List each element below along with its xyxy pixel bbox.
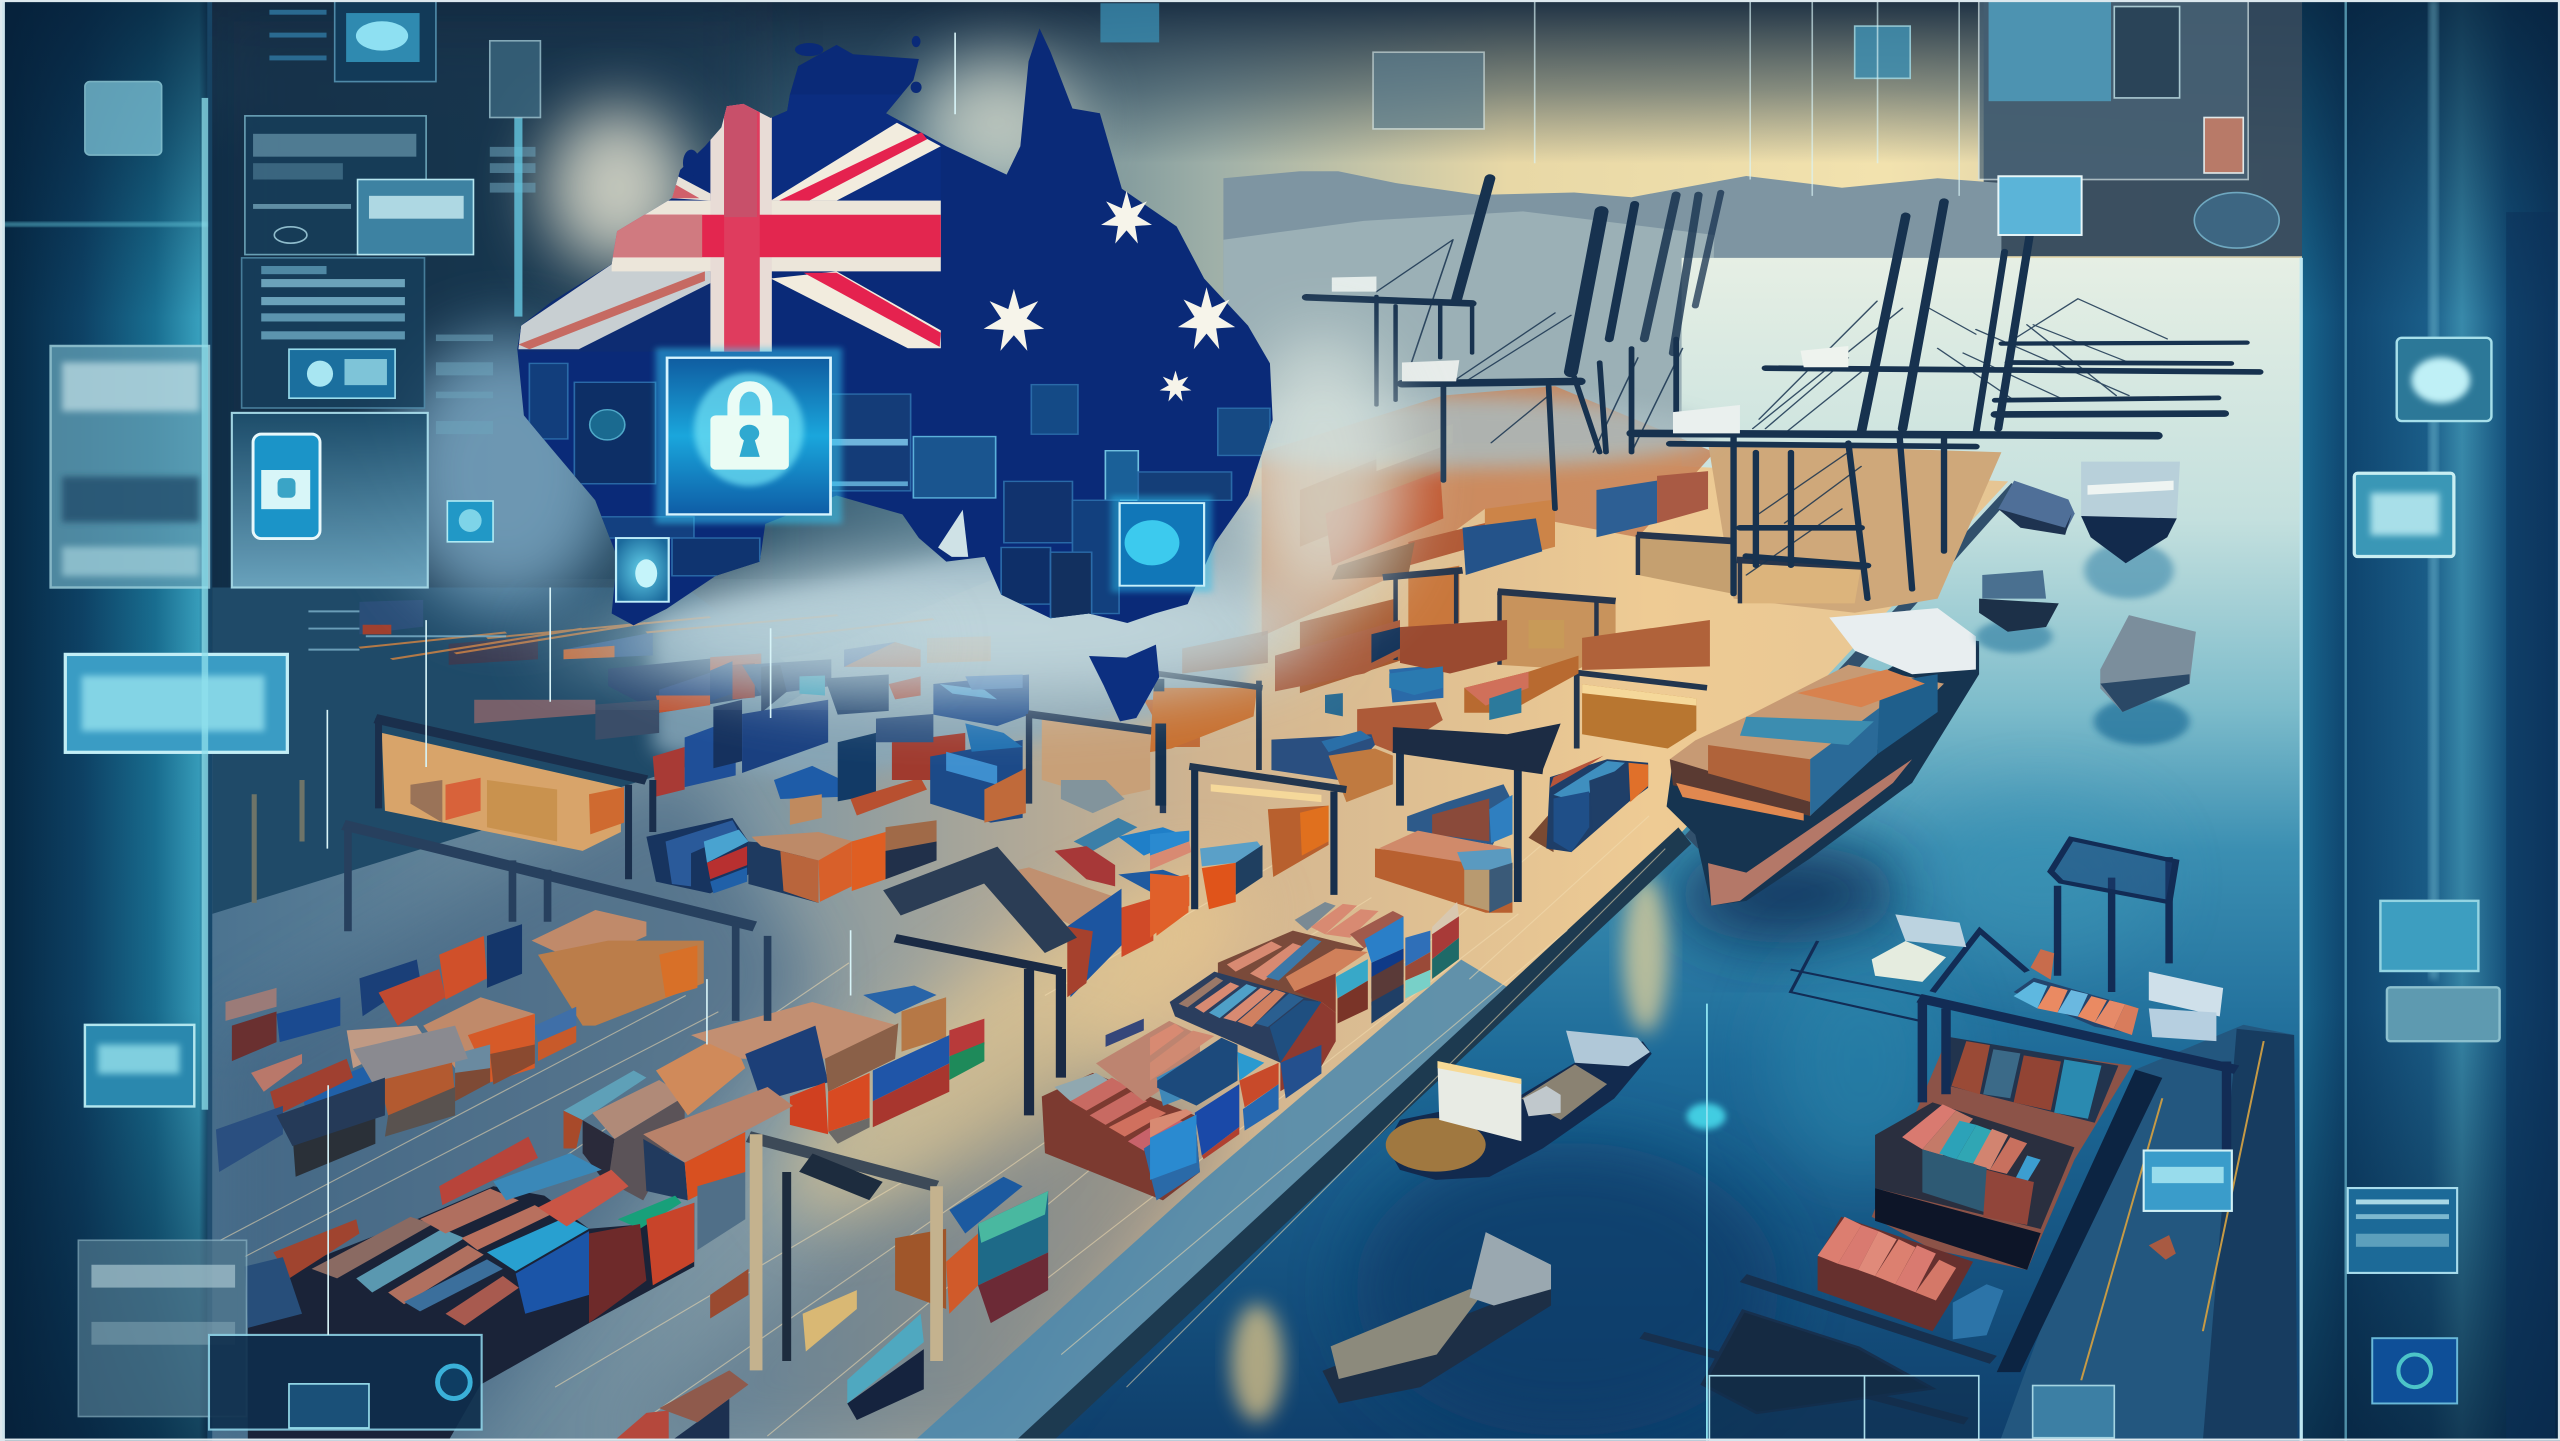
card: wifi icon: [289, 349, 395, 398]
panel: globe icon: [2372, 1338, 2457, 1403]
left UI panels: [51, 82, 287, 1417]
Australia map with flag: [513, 28, 1273, 625]
card: shield icon: [1998, 176, 2082, 235]
middle container row: [1875, 1102, 2074, 1270]
panel: wide glowing card: [65, 654, 287, 752]
circuit details lower map: [529, 363, 1270, 618]
warehouse: lit right: [1570, 672, 1707, 749]
card: top left icon: [335, 0, 436, 82]
upper left hazy yard backdrop: [212, 490, 1273, 914]
panel: bottom left card: [78, 1240, 247, 1417]
gantry: rear left: [254, 719, 653, 903]
ship: white ferry: [2081, 462, 2180, 599]
truck on quay: [2149, 1235, 2176, 1260]
ship: grey vessel: [2094, 615, 2196, 745]
panel: top icon: [85, 82, 162, 155]
panel: list: [242, 258, 424, 408]
bright vertical strip: [514, 117, 522, 317]
gantry: rear right: [1028, 714, 1166, 813]
right UI panels: [2348, 338, 2500, 1403]
container yard: left and central stacks: [216, 700, 1200, 1440]
right band: [2300, 0, 2560, 1441]
stack: beside center gantry: [975, 818, 1188, 997]
panel: third: [2380, 901, 2478, 971]
ship deck: [1872, 1041, 2132, 1270]
quay deck: [212, 449, 2018, 1441]
upper crane frame: [1791, 839, 2237, 1151]
gantry: tangled machinery: [1393, 724, 1561, 902]
barge with white cabin: [1386, 1031, 1652, 1180]
side fine rows: [436, 147, 536, 434]
flag stars: [984, 191, 1235, 401]
card: dark rows left of icon: [269, 10, 327, 60]
panel: lower card: [85, 1025, 194, 1106]
dashboard panel upper left: [202, 98, 536, 1110]
crane booms and legs: [1306, 296, 2260, 599]
quay wall: [1016, 827, 1691, 1441]
flag union jack: [513, 94, 941, 352]
container ship main: [1667, 608, 1979, 906]
deck containers: [1670, 665, 1944, 821]
icon: phone with lock: [253, 434, 320, 539]
vertical light lines: [327, 0, 1959, 1441]
stack: left middle: [216, 910, 704, 1177]
stack: top cluster: [474, 700, 1200, 825]
gantry: center machine: [892, 865, 1061, 1115]
card: grid: [490, 41, 540, 117]
stack: beside front gantry: [615, 1177, 1048, 1440]
stack: strip tops row: [1170, 972, 1336, 1098]
hull: [1667, 636, 1979, 906]
deck lane streaks: [220, 767, 1665, 1436]
stack: bottom left large: [245, 1137, 694, 1440]
stack: blue and red row: [1218, 902, 1459, 1023]
icon: heart seal: [2194, 193, 2279, 248]
stack: right by ship: [1529, 756, 1648, 852]
quay markings: [2081, 1041, 2264, 1380]
stack: bottom edge: [1150, 1023, 1279, 1180]
upper yard stacks: [1300, 424, 1861, 703]
stack: second row: [646, 818, 937, 903]
card: quay data: [2144, 1151, 2232, 1211]
front ship bridge frame: [1642, 1278, 1993, 1421]
column glow: [202, 98, 208, 1110]
antifouling stripe: [1708, 759, 1912, 906]
upper row stacks: [1182, 620, 1710, 752]
front container row: [1818, 1217, 2003, 1339]
gantry: lit left: [1189, 766, 1346, 909]
upper yard gantry frames: [1383, 535, 1864, 669]
tug lower center: [1322, 1232, 1551, 1403]
upper left yard containers: [308, 600, 1029, 726]
upper orange containers: [2014, 949, 2139, 1035]
stack: behind center gantry: [1407, 784, 1512, 845]
fog over yard horizon: [1159, 397, 1714, 468]
ship hull dark side: [1997, 1070, 2162, 1372]
map silhouette: [517, 28, 1273, 625]
glowing data panel: [1111, 496, 1212, 592]
crane machine house white roofs: [1332, 277, 1848, 433]
panel: fourth: [2387, 987, 2500, 1041]
harbour quay cranes: [1306, 178, 2260, 599]
panel: chart: [245, 116, 426, 255]
fog bay notch: [938, 510, 968, 557]
water: [1012, 258, 2302, 1441]
padlock icon: [694, 373, 804, 486]
panel: second glow: [2354, 473, 2454, 556]
yard gantry cranes: [254, 714, 1166, 1370]
card: small icon right: [447, 501, 493, 542]
card: bottom quay: [2033, 1386, 2114, 1438]
card: top right mini: [358, 180, 473, 255]
ship: tug one: [1998, 481, 2075, 535]
panel: large data card: [51, 346, 209, 587]
central yard stacks beside the main ship: [1150, 620, 1710, 1180]
gantry: middle: [343, 825, 768, 1021]
top end islands: [683, 36, 922, 176]
card: bottom frame: [1709, 1376, 1979, 1441]
lock panel: [656, 348, 842, 524]
card: top center icon: [1100, 3, 1159, 42]
ship: tug two: [1976, 570, 2059, 653]
left band: [0, 0, 207, 1441]
superstructure: [1829, 608, 1976, 674]
sky gradient: [212, 0, 2302, 702]
rear container row: [1949, 1037, 2118, 1123]
distant hills and city: [1223, 171, 2001, 443]
Tasmania: [1089, 645, 1159, 721]
panel: top glow: [2397, 338, 2491, 421]
stack: mid blue: [1271, 731, 1393, 802]
white cabins: [1872, 914, 2223, 1041]
stack: right of center: [1042, 1019, 1200, 1200]
stack: center large: [563, 986, 984, 1250]
quay strip: [2000, 1025, 2298, 1441]
warehouse: rear left: [1150, 674, 1263, 806]
upper yard warm base: [1262, 386, 1714, 636]
stack: under first gantry: [382, 733, 624, 851]
card: wireframe panel: [1373, 52, 1484, 129]
stack: orange columns: [1375, 831, 1512, 913]
crane masts: [1456, 178, 2030, 433]
harbour crane and loaded ship lower right: [1642, 839, 2298, 1441]
lower harbour UI cards: [1709, 1151, 2232, 1441]
stack: teal and orange upper: [1464, 656, 1579, 720]
card: large top right: [1979, 0, 2248, 180]
panel: data list: [2348, 1188, 2457, 1273]
small ships upper right: [1976, 462, 2196, 745]
stack: under left gantry: [1150, 806, 1329, 938]
bottom left dashboard: [209, 1335, 482, 1430]
crane stays: [1376, 240, 2167, 575]
card: small: [1855, 26, 1910, 78]
fog surrounding map: [392, 57, 1404, 697]
top icon cards: [269, 0, 2279, 248]
small lock panel: [616, 538, 669, 602]
upper yard containers: [1262, 386, 2001, 703]
panel: lower device: [232, 413, 428, 587]
gantry: front frame: [748, 1134, 937, 1370]
